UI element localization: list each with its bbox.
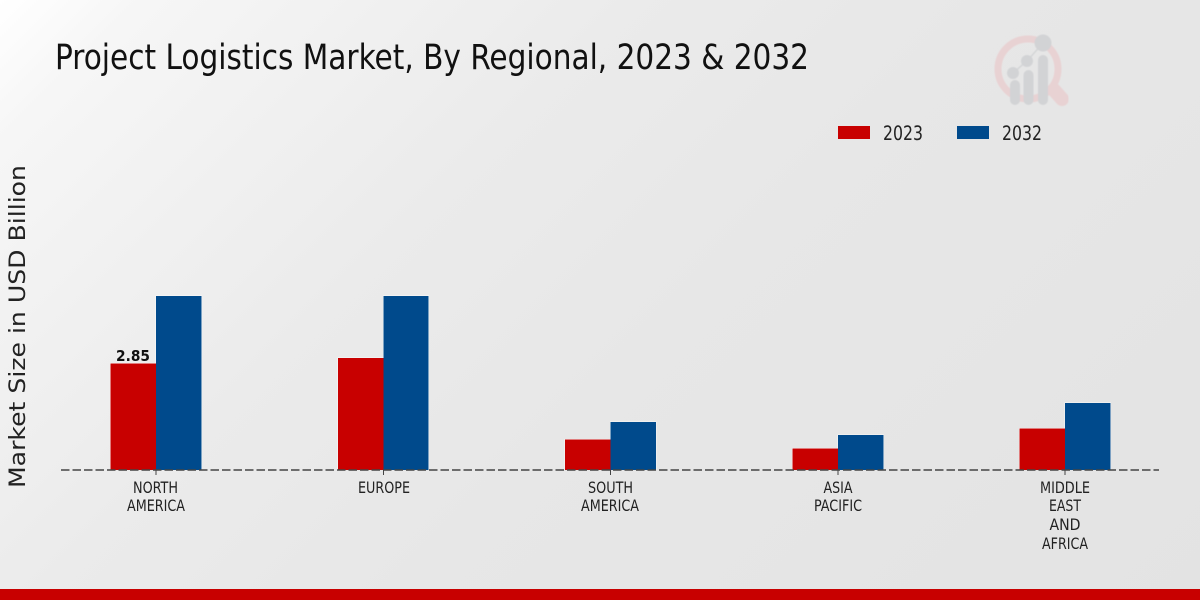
data label: 2.85 [116, 347, 150, 365]
bars: Middle East and Africa [1020, 403, 1110, 470]
icon: watermark logo [998, 34, 1062, 105]
bottom bar [0, 589, 1200, 600]
legend: 2023 [883, 122, 923, 145]
x axis labels: ASIA [824, 478, 853, 497]
baseline axis [61, 470, 1159, 475]
y axis label: Market Size in USD Billion [5, 165, 31, 488]
x axis labels [127, 478, 1090, 553]
x axis labels: AFRICA [1042, 534, 1088, 553]
x axis labels: AMERICA [581, 496, 639, 515]
title: Project Logistics Market, By Regional, 2023 & 2032 [55, 38, 809, 78]
bars: Europe [338, 296, 428, 470]
x axis labels: AMERICA [127, 496, 185, 515]
bars: Asia Pacific [792, 435, 884, 470]
x axis labels: SOUTH [588, 478, 633, 497]
bar chart [61, 296, 1159, 475]
x axis labels: PACIFIC [814, 496, 862, 515]
x axis labels: EUROPE [358, 478, 410, 497]
bars: South America [565, 422, 656, 470]
x axis labels: NORTH [133, 478, 178, 497]
legend: 2032 [1002, 122, 1042, 145]
x axis labels: EAST [1049, 496, 1081, 515]
x axis labels: MIDDLE [1040, 478, 1090, 497]
x axis labels: AND [1050, 515, 1080, 534]
legend [838, 122, 1042, 145]
bars: North America [110, 296, 202, 470]
